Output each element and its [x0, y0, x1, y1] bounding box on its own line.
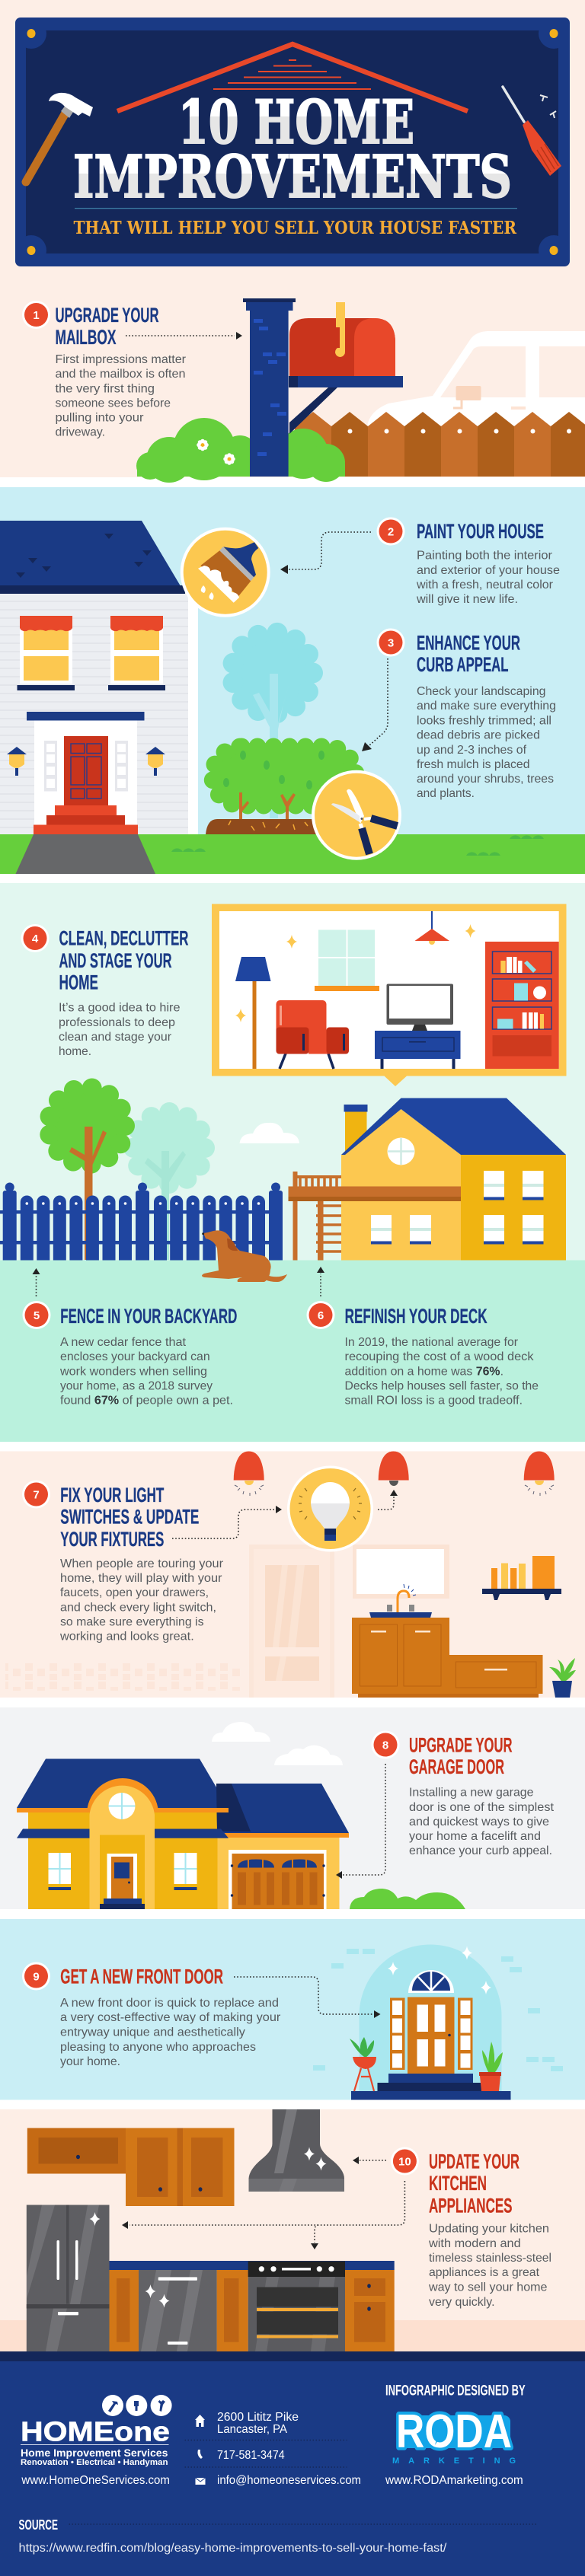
step 8 body text: enhance your curb appeal. [409, 1844, 552, 1857]
step 10 body text: way to sell your home [428, 2281, 548, 2294]
left potted plant [350, 2037, 376, 2091]
illustration: dog [202, 1230, 287, 1282]
step 6 badge [306, 1301, 335, 1329]
illustration: wooden fence [295, 412, 585, 477]
step 2 body text: and exterior of your house [417, 564, 560, 577]
illustration: house with garage [17, 1758, 349, 1909]
step 8 body text: Installing a new garage [409, 1786, 534, 1800]
icon: home [195, 2415, 205, 2427]
arrows: step 10 to appliances [122, 2157, 404, 2249]
room window [315, 930, 379, 991]
icon: hammer [26, 93, 93, 182]
panel: section 4 backdrop [0, 1451, 585, 1698]
illustration: green bush with daisies [136, 418, 345, 483]
armchair [276, 1000, 349, 1069]
step 3 badge [376, 629, 405, 656]
panel: section 3 backdrop [0, 883, 585, 1261]
step 4 badge [21, 924, 49, 952]
step 10 body text: timeless stainless-steel [429, 2252, 551, 2265]
icon: paint brush circle [181, 528, 270, 617]
address [217, 2411, 299, 2436]
windows with awnings [17, 616, 165, 690]
step 10 body text: very quickly. [429, 2296, 495, 2309]
illustration: background tree [232, 633, 312, 818]
step 3 heading: ENHANCE YOUR [417, 632, 520, 655]
illustration: shrub with mulch [206, 747, 356, 834]
header banner [15, 18, 570, 266]
step 7 heading: YOUR FIXTURES [60, 1528, 164, 1551]
illustration: stainless fridge [27, 2205, 109, 2351]
step 5 heading: FENCE IN YOUR BACKYARD [60, 1305, 237, 1328]
step 9 body text: a very cost-effective way of making your [60, 2011, 281, 2024]
illustration: wall lights [234, 1451, 555, 1496]
illustration: yellow house with deck [288, 1098, 566, 1261]
step 7 body text: faucets, open your drawers, [60, 1586, 209, 1599]
illustration: range hood [248, 2109, 344, 2192]
step 10 body text [428, 2223, 551, 2309]
step 3 body text: up and 2-3 inches of [417, 744, 527, 757]
step 8 body text: door is one of the simplest [409, 1801, 555, 1814]
step 3 body text: fresh mulch is placed [417, 758, 530, 771]
step 3 heading [417, 632, 520, 676]
divider band [0, 1698, 585, 1707]
wooden deck and stairs [288, 1172, 461, 1261]
illustration: new front door [350, 1944, 510, 2100]
step 2 badge [376, 518, 405, 545]
step 9 badge [22, 1962, 50, 1990]
step 10 body text: appliances is a great [429, 2266, 540, 2279]
step 10 heading: UPDATE YOUR [429, 2150, 519, 2173]
logo: RODA Marketing: MARKETING [392, 2456, 516, 2466]
illustration: brick mailbox post [243, 298, 296, 477]
step 10 heading [429, 2150, 519, 2217]
step 3 body text: and plants. [417, 787, 475, 800]
website: RODA: www.RODAmarketing.com [385, 2474, 523, 2487]
step 9 body text [60, 1997, 281, 2068]
step 4 body text: home. [59, 1045, 91, 1058]
illustration: potted plant [549, 1658, 576, 1698]
icon: pruning shears circle [312, 770, 401, 860]
step 4 body text [59, 1002, 181, 1058]
step 4 badge: 4 [32, 933, 39, 945]
entry door [100, 1854, 145, 1909]
illustration: upper cabinets [27, 2128, 235, 2206]
illustration: small bush [350, 1889, 465, 1909]
step 3 body text: and make sure everything [417, 700, 556, 713]
step 4 body text: It’s a good idea to hire [59, 1002, 181, 1014]
panel: footer [0, 2351, 585, 2576]
illustration: lawn and walkway [0, 834, 585, 874]
step 3 badge: 3 [388, 636, 394, 650]
illustration: bathroom vanity and mirror [352, 1545, 542, 1698]
arrow: step 7 to bulb [172, 1506, 282, 1538]
arrow: step 2 to brush [280, 532, 371, 574]
step 5 badge: 5 [34, 1309, 40, 1322]
step 10 body text: Updating your kitchen [429, 2223, 549, 2235]
illustration: base cabinets and dishwasher [110, 2261, 395, 2351]
step 6 body text: addition on a home was 76%. [344, 1365, 503, 1378]
icon: phone [198, 2450, 203, 2459]
floor lamp [235, 957, 271, 1069]
step 6 body text: small ROI loss is a good tradeoff. [344, 1395, 523, 1408]
logo: HomeOne: HOMEone [21, 2416, 170, 2447]
step 5 body text: your home, as a 2018 survey [60, 1379, 213, 1393]
email: info@homeoneservices.com [217, 2474, 361, 2487]
step 8 body text: your home a facelift and [409, 1830, 541, 1843]
divider band [0, 1909, 585, 1919]
illustration: oven range [248, 2261, 345, 2351]
step 10 badge: 10 [398, 2156, 411, 2168]
step 9 heading: GET A NEW FRONT DOOR [60, 1965, 223, 1988]
arrow: step 9 to door [234, 1977, 381, 2018]
panel: section 1 background [0, 0, 585, 477]
step 6 body text: Decks help houses sell faster, so the [344, 1379, 539, 1393]
step 8 heading [409, 1734, 512, 1778]
arrow: step 5 to fence [32, 1268, 40, 1296]
step 6 body text [344, 1336, 539, 1408]
panel: section 2 sky [0, 487, 585, 874]
step 7 heading: SWITCHES & UPDATE [60, 1506, 199, 1529]
step 4 heading: AND STAGE YOUR [59, 949, 172, 972]
divider band [0, 874, 585, 883]
arrow: step 3 to shrub [362, 658, 388, 751]
subtitle: THAT WILL HELP YOU SELL YOUR HOUSE FASTER [73, 217, 516, 238]
step 7 badge [22, 1480, 50, 1509]
illustration: white house facade [0, 521, 198, 834]
icon: screwdriver and nails [503, 87, 561, 176]
right potted plant [479, 2042, 503, 2091]
step 4 heading: CLEAN, DECLUTTER [59, 927, 189, 950]
panel: section 5 backdrop [0, 1707, 585, 1909]
divider band [0, 2099, 585, 2109]
step 2 body text [416, 550, 560, 606]
step 6 badge: 6 [318, 1309, 324, 1322]
step 10 body text: with modern and [428, 2237, 521, 2250]
step 6 body text: recouping the cost of a wood deck [344, 1350, 535, 1363]
garage door [229, 1850, 326, 1909]
step 9 body text: A new front door is quick to replace and [60, 1997, 279, 2010]
step 4 body text: professionals to deep [59, 1016, 175, 1029]
step 7 heading [60, 1484, 199, 1551]
step 10 heading: APPLIANCES [429, 2194, 512, 2217]
illustration: interior door [249, 1545, 334, 1698]
step 3 body text: dead debris are picked [417, 729, 540, 741]
step 2 body text: with a fresh, neutral color [416, 579, 554, 591]
step 7 heading: FIX YOUR LIGHT [60, 1484, 165, 1506]
step 9 badge: 9 [33, 1970, 40, 1984]
step 1 body text: and the mailbox is often [55, 368, 185, 381]
step 4 heading: HOME [59, 971, 98, 994]
icon: light bulb circle [287, 1466, 373, 1551]
panel: section 6 backdrop [0, 1919, 585, 2099]
icon: envelope [195, 2478, 206, 2485]
illustration: red mailbox [289, 302, 403, 434]
step 7 body text [59, 1557, 224, 1643]
panel: backyard lawn [0, 1261, 585, 1442]
porch and red door [27, 712, 145, 834]
step 8 badge [372, 1731, 399, 1758]
step 2 body text: will give it new life. [416, 593, 518, 606]
step 5 body text: encloses your backyard can [60, 1350, 210, 1363]
title: 10 HOME [178, 87, 414, 158]
step 9 body text: entryway unique and aesthetically [60, 2026, 245, 2039]
address: 2600 Lititz Pike [217, 2411, 299, 2424]
step 9 body text: your home. [60, 2055, 120, 2068]
step 2 badge: 2 [388, 525, 394, 539]
arrow: bulb to wall light [378, 1490, 398, 1510]
step 3 body text [417, 685, 556, 800]
side windows [49, 1853, 197, 1890]
house windows [371, 1171, 544, 1244]
step 1 body text [55, 353, 187, 438]
step 3 heading: CURB APPEAL [417, 653, 509, 676]
illustration: blue picket fence [0, 1183, 283, 1271]
step 1 heading: UPGRADE YOUR [55, 304, 158, 327]
step 10 heading: KITCHEN [429, 2172, 487, 2195]
illustration: parked white car [367, 331, 585, 477]
step 4 body text: clean and stage your [59, 1031, 172, 1044]
step 3 body text: looks freshly trimmed; all [417, 714, 551, 728]
panel: section 7 backdrop [0, 2109, 585, 2351]
step 8 body text [409, 1786, 555, 1857]
step 5 body text [59, 1336, 233, 1408]
step 7 body text: and check every light switch, [60, 1601, 216, 1614]
logo: HomeOne [21, 2395, 172, 2467]
source url: https://www.redfin.com/blog/easy-home-improvements-to-sell-your-home-fast/ [18, 2542, 447, 2555]
red bookcase [485, 942, 559, 1069]
arrow: step 6 to deck [317, 1267, 324, 1296]
step 6 body text: In 2019, the national average for [344, 1336, 519, 1349]
television and console [375, 984, 460, 1069]
wall lanterns [7, 747, 165, 776]
step 9 body text: pleasing to anyone who approaches [60, 2041, 256, 2054]
step 1 body text: someone sees before [55, 397, 171, 410]
decorative bricks [5, 1663, 241, 1691]
step 7 body text: working and looks great. [59, 1631, 194, 1643]
step 7 body text: When people are touring your [60, 1557, 224, 1570]
step 7 body text: so make sure everything is [60, 1615, 204, 1629]
logo: RODA Marketing: RODA [396, 2405, 512, 2458]
arrow: step 8 to garage door [336, 1764, 385, 1879]
step 2 body text: Painting both the interior [417, 550, 553, 562]
dishwasher [139, 2270, 217, 2351]
step 8 badge: 8 [382, 1739, 388, 1752]
address: Lancaster, PA [217, 2423, 287, 2436]
step 1 body text: pulling into your [55, 411, 144, 425]
step 1 body text: the very first thing [55, 382, 155, 396]
sparkles [235, 924, 475, 1022]
step 5 badge [23, 1301, 50, 1329]
illustration: staged room callout [212, 904, 567, 1086]
step 7 body text: home, they will play with your [60, 1572, 222, 1585]
icon: roof outline [117, 44, 468, 111]
step 1 body text: driveway. [55, 426, 105, 438]
step 1 badge: 1 [33, 309, 40, 322]
divider band [0, 477, 585, 487]
step 8 body text: and quickest ways to give [409, 1816, 549, 1828]
decorative bricks [313, 1949, 563, 2071]
illustration: cloud [239, 1123, 299, 1143]
designer credit: INFOGRAPHIC DESIGNED BY [385, 2383, 526, 2399]
step 1 badge [22, 301, 50, 329]
pendant light [414, 911, 449, 945]
step 7 badge: 7 [33, 1489, 40, 1501]
website: HomeOne: www.HomeOneServices.com [21, 2474, 170, 2487]
logo: HomeOne: Renovation • Electrical • Handyman [21, 2458, 168, 2467]
title [73, 87, 512, 212]
step 6 heading: REFINISH YOUR DECK [345, 1305, 488, 1328]
illustration: wall shelf with books [482, 1556, 561, 1600]
step 5 body text: A new cedar fence that [60, 1336, 187, 1349]
phone number: 717-581-3474 [217, 2449, 285, 2462]
step 1 heading [55, 304, 158, 349]
divider band [0, 1442, 585, 1451]
step 8 heading: UPGRADE YOUR [409, 1734, 512, 1757]
step 5 body text: found 67% of people own a pet. [60, 1395, 233, 1408]
step 1 body text: First impressions matter [55, 353, 187, 366]
step 5 body text: work wonders when selling [59, 1365, 207, 1378]
step 8 heading: GARAGE DOOR [409, 1755, 504, 1778]
illustration: clouds [212, 1722, 343, 1765]
step 1 heading: MAILBOX [55, 326, 116, 349]
logo: HomeOne: Home Improvement Services [21, 2447, 168, 2459]
step 10 badge [391, 2147, 419, 2176]
step 3 body text: around your shrubs, trees [417, 773, 554, 786]
step 4 heading [59, 927, 189, 994]
source label: SOURCE [18, 2517, 58, 2533]
step 3 body text: Check your landscaping [417, 685, 545, 698]
illustration: backyard trees [49, 1088, 205, 1260]
arrow: step 1 to mailbox [126, 332, 242, 340]
